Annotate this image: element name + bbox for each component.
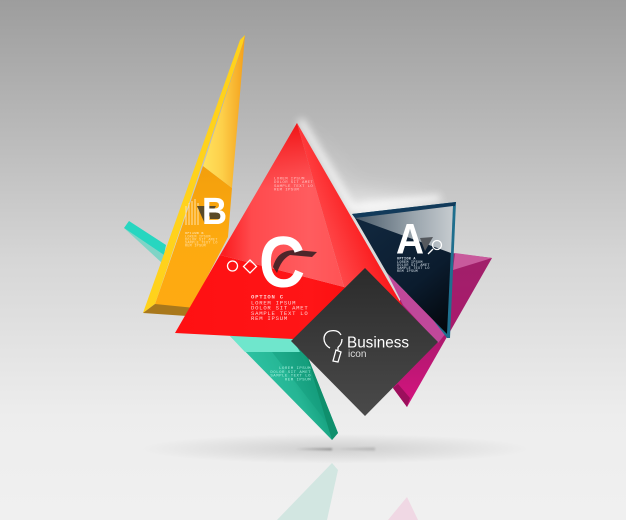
lorem text on upper face: REM IPSUM [274,188,299,192]
option C text: LOREM IPSUM [251,300,296,306]
green top facet [230,336,300,352]
bottom bevel [143,304,195,316]
green side facet [305,350,338,440]
business label: Business [347,334,409,352]
lorem text on upper face: LOREM IPSUM [274,178,305,182]
option C text: DOLOR SIT AMET [251,304,308,312]
option A text: SAMPLE TEXT LO [397,267,430,271]
glow behind red triangle [297,118,440,250]
option A text: DOLOR SIT AMET [397,264,430,268]
green text: REM IPSUM [285,378,311,382]
option C text: REM IPSUM [251,315,288,322]
green text: LOREM IPSUM [279,367,311,371]
green text: DOLOR SIT AMET [270,371,311,375]
right darker facet [297,123,402,305]
teal back shard [124,221,166,263]
circle icon [228,261,238,271]
option B text: OPTION B [185,232,204,236]
panel: business diamond [291,268,438,416]
panel: option B yellow triangle [143,35,245,316]
green text [270,367,311,382]
panel: green triangle [230,336,338,440]
lorem text on upper face [274,178,313,192]
glass facet [355,206,453,253]
icon: light bulb [324,331,342,362]
floor shadow [140,434,530,464]
letter shadow [197,206,222,224]
lorem text on upper face: DOLOR SIT AMET [274,181,313,185]
panel: option C red triangle [175,123,402,339]
option C text [251,294,308,322]
magnifier icon [428,240,442,254]
letter shadow [420,237,433,251]
option A text: OPTION A [397,258,416,262]
letter shadow [273,250,317,273]
option A text: REM IPSUM [397,270,418,274]
option B text: REM IPSUM [185,244,206,248]
option B text: LOREM IPSUM [185,236,211,240]
reflection: magenta triangle [388,497,418,520]
lorem text on upper face: SAMPLE TEXT LO [274,185,313,189]
icon label: icon [348,349,366,360]
option B text [185,232,218,248]
option A text: LOREM IPSUM [397,261,423,265]
green darker stripe [272,352,334,432]
letter A: A [396,216,424,264]
diamond icon [244,260,256,273]
magenta top facet [453,253,492,270]
reflection: green triangle [277,463,338,520]
lower dark red band [175,255,402,339]
option A text [397,258,430,274]
option B text: DOLOR SIT AMET [185,238,218,242]
magenta bevel [393,384,410,407]
green text: SAMPLE TEXT LO [270,374,311,378]
panel: magenta triangle [387,253,492,407]
option B text: SAMPLE TEXT LO [185,242,218,246]
light red facet [220,123,344,287]
letter B: B [202,191,227,233]
option C text: SAMPLE TEXT LO [251,310,308,317]
magenta pink strip [387,273,446,343]
panel: option A dark triangle [352,202,456,338]
letter C: C [259,223,305,303]
stripes icon [186,199,198,225]
option C text: OPTION C [251,294,284,300]
yellow highlight facet [203,35,245,188]
apex shading [220,123,344,287]
